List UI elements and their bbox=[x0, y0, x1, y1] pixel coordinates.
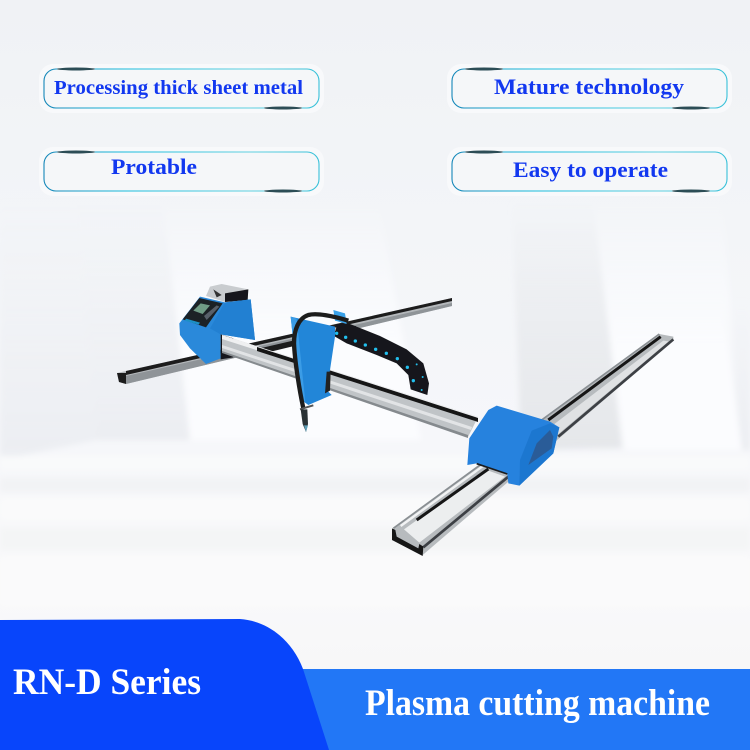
display panel bbox=[183, 298, 223, 327]
left rail bbox=[117, 298, 452, 384]
footer tab: RN-D Series bbox=[0, 619, 329, 750]
housing bbox=[179, 297, 255, 364]
cable drag chain bbox=[335, 324, 429, 395]
badge: Processing thick sheet metal bbox=[39, 64, 324, 113]
plasma cutting machine illustration bbox=[117, 284, 673, 556]
badge: Easy to operate: Easy to operate bbox=[513, 157, 668, 182]
gantry beam bbox=[222, 335, 478, 438]
control box top bbox=[206, 284, 248, 302]
footer band: Plasma cutting machine bbox=[300, 669, 750, 750]
badge: Protable bbox=[39, 147, 324, 196]
torch bbox=[294, 314, 348, 432]
badge: Protable: Protable bbox=[111, 154, 197, 179]
footer tab: RN-D Series: RN-D Series bbox=[13, 662, 201, 703]
badge: Processing thick sheet metal: Processing thick sheet metal bbox=[54, 77, 303, 99]
footer band: Plasma cutting machine: Plasma cutting machine bbox=[365, 683, 710, 724]
badge: Mature technology: Mature technology bbox=[494, 74, 684, 99]
badge: Easy to operate bbox=[447, 147, 732, 196]
right rail bbox=[392, 334, 673, 556]
badge: Mature technology bbox=[447, 64, 732, 113]
left carriage with control panel bbox=[179, 284, 255, 364]
middle torch carriage bbox=[291, 310, 429, 432]
right carriage bbox=[467, 406, 559, 486]
